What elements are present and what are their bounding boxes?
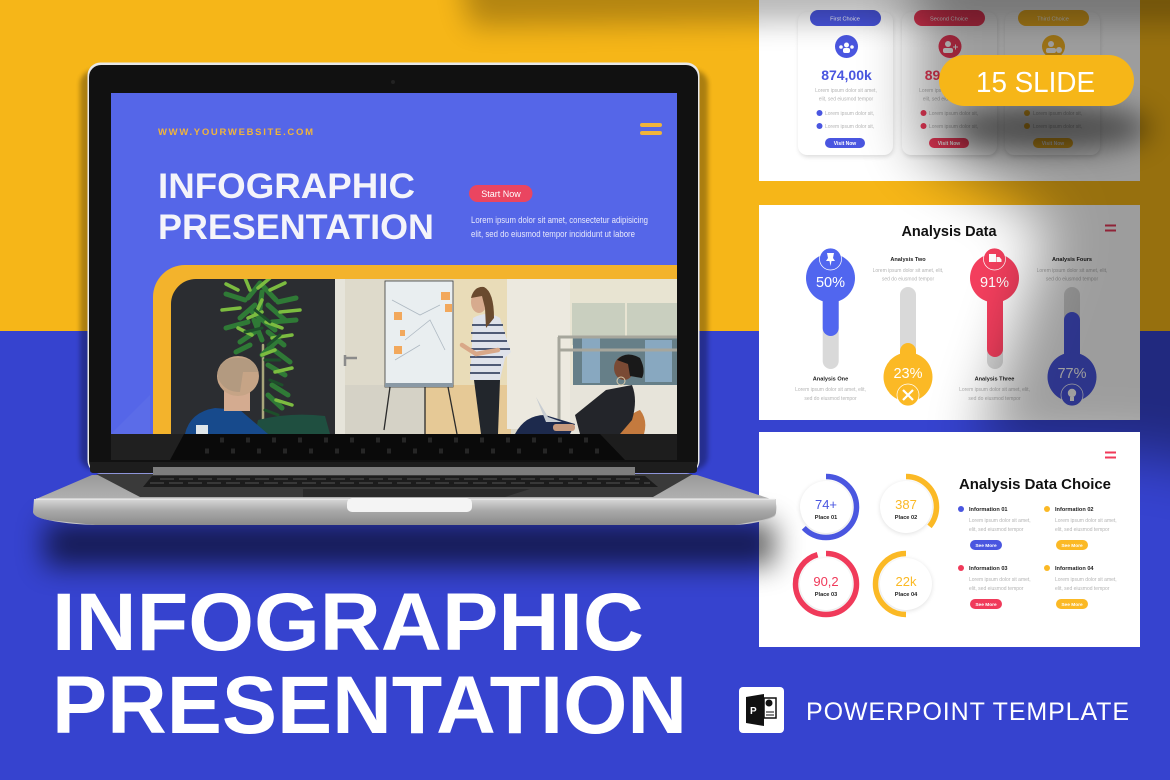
ring 387: 387 [895, 497, 917, 512]
information 03: elit, sed eiusmod tempor [969, 586, 1024, 592]
information 02: Lorem ipsum dolor sit amet, [1055, 518, 1117, 524]
information 04: Information 04 [1055, 566, 1094, 572]
soft shadows falling on yellow area and upper slides [450, 0, 1170, 480]
powerpoint icon [739, 687, 784, 733]
gauge 77 percent [1037, 257, 1107, 406]
information 04: elit, sed eiusmod tempor [1055, 586, 1110, 592]
menu icon [642, 125, 660, 133]
choice card two: Visit Now [938, 141, 960, 147]
seated woman with laptop [515, 354, 645, 434]
main title: PRESENTATION [52, 660, 687, 751]
choice card three [1005, 10, 1100, 157]
gauge 77 percent: 77% [1057, 366, 1087, 382]
information 01: See More [975, 543, 997, 549]
gauge 77 percent: Lorem ipsum dolor sit amet, elit, [1037, 268, 1107, 274]
laptop drop shadow [45, 522, 775, 566]
yellow photo frame [153, 265, 677, 434]
powerpoint template label: POWERPOINT TEMPLATE [806, 698, 1129, 726]
laptop base [33, 474, 776, 525]
ring 22k [876, 554, 936, 614]
gauge 23 percent: Analysis Two [890, 257, 926, 263]
choice card one: First Choice [830, 16, 860, 22]
laptop lid shadow [80, 70, 708, 470]
slide preview: analysis data choice rings [759, 432, 1140, 647]
main title [52, 577, 687, 751]
whiteboard [384, 281, 457, 434]
gauge 50 percent [795, 248, 866, 402]
ring 74+: Place 01 [815, 515, 837, 521]
gauge 77 percent: Analysis Fours [1052, 257, 1092, 263]
sofa [255, 415, 330, 434]
main title: INFOGRAPHIC [52, 577, 644, 668]
menu icon [1105, 226, 1116, 230]
information 02: elit, sed eiusmod tempor [1055, 527, 1110, 533]
office photo [171, 278, 677, 434]
15 slide badge [939, 55, 1134, 106]
door handle [345, 355, 357, 366]
choice card two [902, 10, 997, 157]
information 01 [958, 506, 1031, 550]
screen paragraph: Lorem ipsum dolor sit amet, consectetur adipisicing [471, 215, 648, 225]
ring 74+: 74+ [815, 497, 837, 512]
choice card one: Lorem ipsum dolor sit, [825, 111, 874, 117]
keyboard reflection [111, 434, 677, 460]
choice card two: 896,00k [925, 67, 976, 83]
information 01: elit, sed eiusmod tempor [969, 527, 1024, 533]
screen paragraph: elit, sed do eiusmod tempor incididunt ut labore [471, 229, 635, 239]
choice card three: Lorem ipsum dolor sit, [1033, 111, 1082, 117]
ring 387 [876, 476, 936, 538]
hinge strip [153, 467, 635, 475]
information 01: Information 01 [969, 507, 1008, 513]
ring 90,2 [796, 554, 856, 614]
15 slide badge: 15 SLIDE [976, 67, 1095, 99]
white column and windows [507, 279, 573, 429]
information 01: Lorem ipsum dolor sit amet, [969, 518, 1031, 524]
gauge 23 percent [873, 257, 943, 406]
laptop lid [88, 62, 700, 474]
ring 22k: Place 04 [895, 592, 918, 598]
information 02: See More [1061, 543, 1083, 549]
screen paragraph [471, 215, 648, 239]
gauge 77 percent: sed do eiusmod tempor [1046, 276, 1098, 282]
website label: WWW.YOURWEBSITE.COM [158, 127, 313, 138]
ring 90,2: Place 03 [815, 592, 837, 598]
ring 387: Place 02 [895, 515, 917, 521]
screen heading: PRESENTATION [158, 208, 434, 247]
screen glass glare [111, 395, 150, 434]
choice card three: Third Choice [1037, 16, 1069, 22]
gauge 91 percent: sed do eiusmod tempor [968, 396, 1021, 402]
laptop screen slide [111, 93, 677, 434]
choice card two: Lorem ipsum dolor sit, [929, 124, 978, 130]
screen heading [158, 167, 434, 247]
ring 22k: 22k [896, 574, 917, 589]
gauge 91 percent: Analysis Three [975, 376, 1014, 382]
choice card one: Visit Now [834, 141, 856, 147]
information 03: See More [975, 602, 997, 608]
webcam [391, 80, 395, 84]
gauge 23 percent: 23% [893, 366, 923, 382]
plant [222, 278, 300, 420]
screen heading: INFOGRAPHIC [158, 167, 415, 206]
seated man [185, 356, 268, 434]
choice card two: elit, sed eiusmod tempor [923, 96, 978, 102]
information 02 [1044, 506, 1117, 550]
choice card one: elit, sed eiusmod tempor [819, 96, 874, 102]
start now button: Start Now [481, 189, 521, 199]
information 03 [958, 565, 1031, 609]
laptop [33, 62, 776, 525]
gauge 50 percent: Lorem ipsum dolor sit amet, elit, [795, 387, 866, 393]
information 04: Lorem ipsum dolor sit amet, [1055, 577, 1117, 583]
choice card one: Lorem ipsum dolor sit, [825, 124, 874, 130]
choice card one: Lorem ipsum dolor sit amet, [815, 88, 877, 94]
gauge 23 percent: sed do eiusmod tempor [882, 276, 934, 282]
gauge 50 percent: Analysis One [813, 376, 848, 382]
lower lid bezel [90, 462, 697, 473]
gauge 91 percent [959, 248, 1030, 402]
information 02: Information 02 [1055, 507, 1094, 513]
powerpoint icon: P [750, 706, 757, 717]
gauge 91 percent: 91% [980, 275, 1009, 291]
slide heading: Analysis Data Choice [959, 477, 1111, 493]
information 04: See More [1061, 602, 1083, 608]
choice card two: Second Choice [930, 16, 968, 22]
choice card two: Lorem ipsum dolor sit amet, [919, 88, 981, 94]
slide preview: analysis data thermometers [759, 205, 1140, 420]
information 03: Lorem ipsum dolor sit amet, [969, 577, 1031, 583]
gauge 50 percent: sed do eiusmod tempor [804, 396, 857, 402]
standing presenter [462, 287, 511, 434]
information 03: Information 03 [969, 566, 1008, 572]
slide preview: pricing choices [759, 0, 1140, 181]
choice card two: Lorem ipsum dolor sit, [929, 111, 978, 117]
information 04 [1044, 565, 1117, 609]
gauge 23 percent: Lorem ipsum dolor sit amet, elit, [873, 268, 943, 274]
start now button [469, 185, 532, 202]
ring 90,2: 90,2 [813, 574, 839, 589]
menu icon [1105, 452, 1116, 458]
choice card one [798, 10, 893, 157]
ring 74+ [796, 476, 856, 538]
choice card one: 874,00k [821, 67, 872, 83]
gauge 91 percent: Lorem ipsum dolor sit amet, elit, [959, 387, 1030, 393]
slide heading: Analysis Data [901, 224, 997, 240]
choice card three: Visit Now [1042, 141, 1064, 147]
gauge 50 percent: 50% [816, 275, 845, 291]
choice card three: Lorem ipsum dolor sit, [1033, 124, 1082, 130]
